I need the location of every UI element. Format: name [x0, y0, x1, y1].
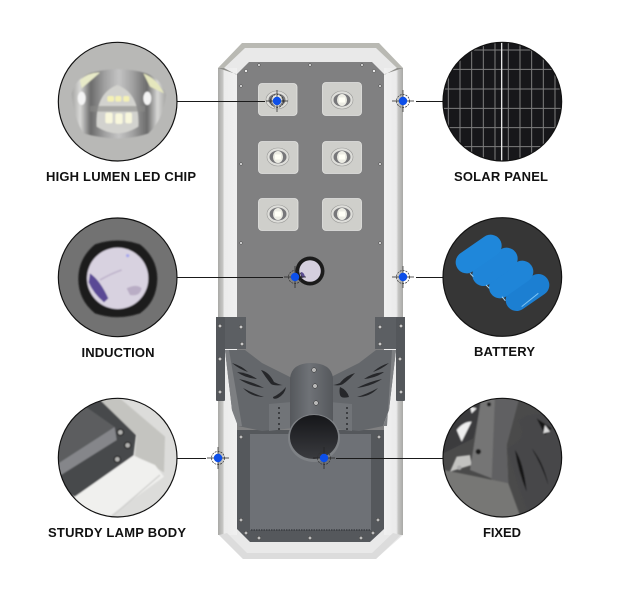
panel: sturdy lamp body: [48, 395, 186, 540]
gray back plate: [237, 62, 384, 434]
label: fixed: FIXED: [483, 525, 521, 540]
label: induction: INDUCTION: [82, 345, 154, 360]
panel: fixed: [440, 395, 565, 540]
label: high lumen LED chip: HIGH LUMEN LED CHIP: [46, 169, 196, 184]
panel: battery: [440, 215, 565, 359]
mounting tube: [288, 363, 340, 462]
mounting brackets: [216, 317, 405, 401]
LED modules: [258, 82, 362, 230]
panel: induction: [57, 215, 180, 360]
left wing: [225, 350, 294, 431]
battery box: [237, 430, 384, 542]
lamp body: [216, 43, 405, 559]
panel: high lumen LED chip: [46, 40, 196, 184]
right wing: [327, 350, 396, 431]
label: sturdy lamp body: STURDY LAMP BODY: [48, 525, 186, 540]
panel: solar panel: [440, 40, 565, 184]
induction sensor: [296, 256, 324, 286]
location markers: [207, 90, 414, 469]
connector lines: [177, 102, 443, 458]
label: solar panel: SOLAR PANEL: [454, 169, 548, 184]
plate screws: [240, 64, 381, 244]
label: battery: BATTERY: [474, 344, 535, 359]
